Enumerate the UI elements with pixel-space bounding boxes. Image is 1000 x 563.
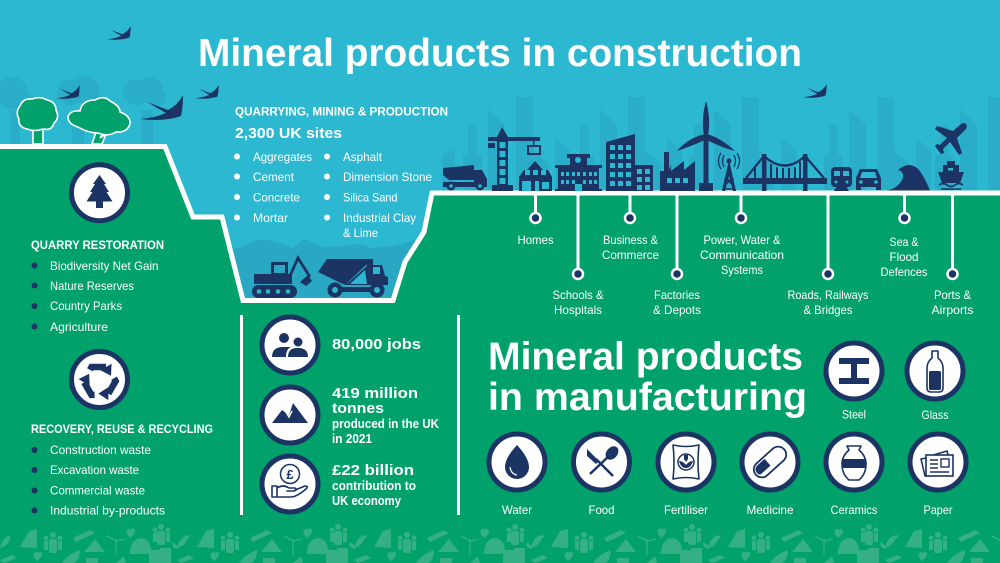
list: restoration uses: Biodiversity Net Gain (50, 259, 158, 273)
icon: aeroplane (935, 123, 967, 155)
heading: mineral products in manufacturing: Mineral products (488, 336, 803, 378)
leader: sea and flood defences (880, 195, 928, 279)
footer icon pattern (0, 524, 1000, 563)
icon: steel (826, 343, 882, 422)
leader: schools and hospitals: Hospitals (554, 303, 602, 317)
divider: right (457, 315, 460, 515)
leader: sea and flood defences: Defences (880, 265, 928, 279)
heading: recovery: RECOVERY, REUSE & RECYCLING (31, 422, 213, 436)
stat: tonnes (262, 385, 439, 446)
icon: paper (910, 434, 966, 517)
panel: quarry restoration (31, 165, 164, 334)
panel: quarrying text: Asphalt (343, 150, 383, 164)
leader: business and commerce: Commerce (602, 248, 659, 262)
icon: dump truck (318, 259, 388, 298)
icon: ceramics: Ceramics (830, 503, 878, 517)
leader: power, water and communication: Systems (721, 263, 763, 277)
stat: jobs (262, 317, 421, 373)
icon: glass: Glass (922, 408, 948, 422)
list: restoration uses: Agriculture (50, 320, 108, 334)
divider: left (240, 315, 243, 515)
icon: fir tree (72, 165, 128, 221)
heading: quarry restoration: QUARRY RESTORATION (31, 238, 164, 252)
icon: recycling arrows (72, 352, 128, 408)
panel: quarrying text: Concrete (253, 190, 300, 204)
panel: quarrying text: Aggregates (253, 150, 312, 164)
stat: tonnes: produced in the UK (332, 417, 439, 431)
icon: food (574, 434, 630, 517)
leader: factories and depots: & Depots (653, 303, 701, 317)
panel: quarrying text: Cement (253, 170, 295, 184)
stat: economy: £ (286, 467, 294, 482)
icon: ceramics (826, 434, 882, 517)
icon: suspension bridge (743, 154, 827, 191)
heading: mineral products in manufacturing (488, 336, 807, 419)
list: restoration uses (32, 259, 158, 334)
stat: economy: UK economy (332, 494, 401, 508)
icon: paper: Paper (924, 503, 952, 517)
birds (56, 26, 827, 120)
icon: crane (488, 127, 541, 191)
heading: mineral products in manufacturing: in manufacturing (488, 376, 807, 419)
leader: ports and airports: Ports & (934, 288, 971, 302)
list: waste streams (32, 443, 165, 518)
icon: water (489, 434, 545, 517)
leader: schools and hospitals (552, 195, 604, 317)
stat: tonnes: in 2021 (332, 432, 372, 446)
icon: medicine (742, 434, 798, 517)
leader: ports and airports (932, 195, 974, 317)
panel: quarrying text (234, 104, 448, 240)
ghost hills in quarry (228, 238, 420, 300)
leader: ports and airports: Airports (932, 303, 974, 317)
panel: quarrying text: Silica Sand (343, 190, 398, 204)
leader: roads, railways and bridges: & Bridges (804, 303, 852, 317)
icon: hospital (555, 154, 602, 191)
icon: excavator (252, 258, 312, 298)
icon: factory (660, 152, 695, 191)
panel: quarrying text: 2,300 UK sites (235, 125, 342, 142)
tree: right (68, 98, 130, 144)
icon: glass (907, 343, 963, 422)
leader: factories and depots (653, 195, 701, 317)
leader: roads, railways and bridges: Roads, Railways (788, 288, 868, 302)
ghost city skyline (442, 97, 1000, 195)
stat: tonnes: 419 million (332, 385, 418, 402)
icon: communications mast (718, 153, 740, 191)
icon: wave (886, 165, 930, 190)
list: restoration uses: Country Parks (50, 299, 122, 313)
leader: sea and flood defences: Sea & (890, 235, 918, 249)
leader: business and commerce (602, 195, 659, 262)
leader: factories and depots: Factories (654, 288, 700, 302)
panel: quarrying text: QUARRYING, MINING & PRODUCTION (235, 104, 448, 118)
stat: tonnes: tonnes (332, 400, 384, 417)
icon: medicine: Medicine (746, 503, 794, 517)
list: waste streams: Excavation waste (50, 463, 139, 477)
leader: power, water and communication (700, 195, 784, 277)
list: waste streams: Commercial waste (50, 484, 145, 498)
leader: sea and flood defences: Flood (890, 250, 918, 264)
icon: tipper truck (443, 165, 487, 190)
ghost trees (0, 76, 166, 146)
leader: roads, railways and bridges (788, 195, 868, 317)
tree: left (17, 98, 58, 144)
list: waste streams: Industrial by-products (50, 504, 165, 518)
panel: construction skyline icons (443, 101, 967, 191)
icon: water: Water (502, 503, 532, 517)
icon: car (856, 169, 881, 190)
list: waste streams: Construction waste (50, 443, 151, 457)
panel: quarrying text: Mortar (253, 211, 288, 225)
panel: recovery, reuse and recycling (31, 352, 213, 518)
stat: economy (262, 456, 416, 512)
stat: economy: contribution to (332, 479, 416, 493)
leader: power, water and communication: Communication (700, 248, 784, 262)
icon: office block (606, 134, 653, 191)
icon: fertiliser: Fertiliser (664, 503, 708, 517)
leader: power, water and communication: Power, Water & (704, 233, 780, 247)
leader: homes: Homes (518, 233, 554, 247)
panel: quarrying text: Dimension Stone (343, 170, 432, 184)
icon: steel: Steel (842, 408, 866, 422)
panel: quarrying text: Industrial Clay (343, 211, 416, 225)
title: Mineral products in construction (198, 32, 802, 75)
leader: schools and hospitals: Schools & (552, 288, 604, 302)
leader: homes (518, 195, 554, 247)
icon: train (831, 167, 852, 191)
stat: economy: £22 billion (332, 462, 414, 479)
panel: quarrying text: & Lime (343, 226, 378, 240)
list: restoration uses: Nature Reserves (50, 279, 134, 293)
icon: ship (938, 161, 964, 189)
leader: business and commerce: Business & (603, 233, 658, 247)
icon: food: Food (588, 503, 614, 517)
green ground with quarry cut (0, 146, 1000, 563)
sky background (0, 0, 1000, 300)
stat: jobs: 80,000 jobs (332, 336, 421, 353)
icon: fertiliser (658, 434, 714, 517)
icon: homes (519, 161, 552, 191)
icon: wind turbine (677, 101, 735, 191)
